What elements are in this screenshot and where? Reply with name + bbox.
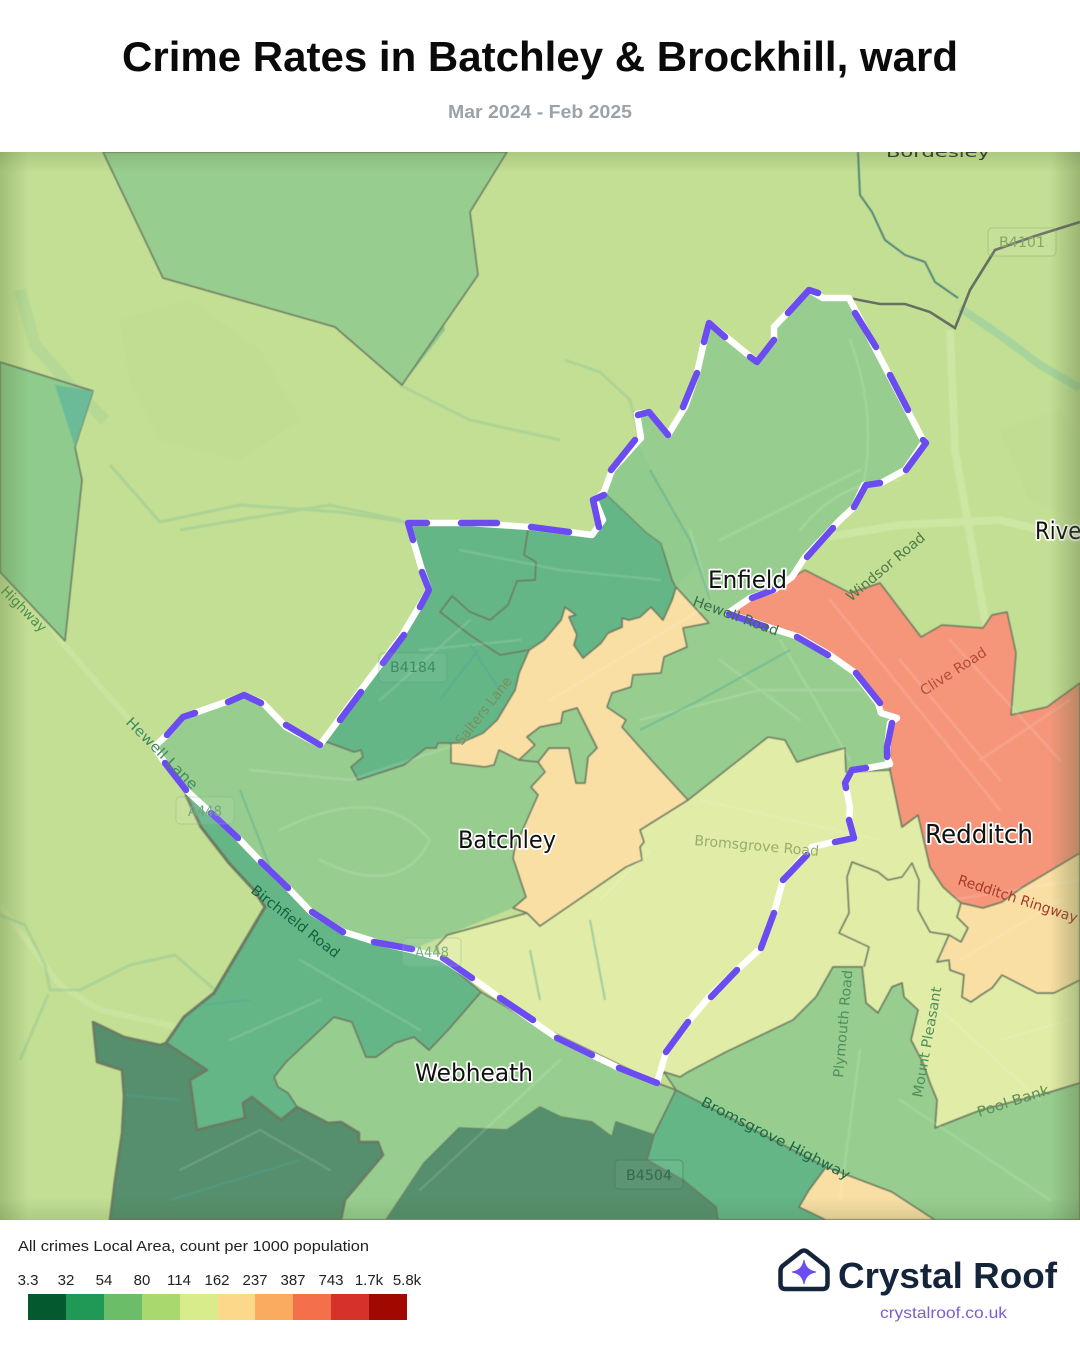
road labels: Plymouth Road [831,969,856,1078]
legend heading: All crimes Local Area, count per 1000 population [18,1238,369,1255]
ward boundary: white underlay [154,290,924,1083]
road shields: B4184 [390,660,436,676]
region: medium green internal shade [607,494,677,587]
road labels: Salters Lane [453,674,516,748]
road labels: Mount Pleasant [910,985,945,1099]
place labels: Redditch [925,820,1033,850]
legend values: 237 [242,1272,268,1289]
legend values: 54 [96,1272,112,1289]
legend values: 743 [318,1272,344,1289]
road labels: Redditch Ringway [956,873,1080,926]
region: beige Batchley centre [451,587,709,926]
road labels: Hewell Lane [122,715,201,793]
region: green B4504 [647,1090,826,1220]
background roads and streams [0,152,1080,1060]
legend values: 32 [58,1272,74,1289]
icon: house outline [780,1250,828,1289]
road labels [0,145,1080,1183]
legend colour scale [28,1294,407,1320]
region: medium green south west (Webheath) [274,992,676,1220]
street and stream detail [125,340,1080,1200]
map base layers [0,152,1080,1220]
region: darkest green south centre [386,1107,718,1220]
road shields: A448 [188,804,222,820]
place labels [415,517,1080,1087]
place labels: Batchley [458,826,556,854]
road shields: A448 [415,945,449,961]
legend values: 162 [204,1272,230,1289]
road labels: Hewell Road [691,594,781,640]
region: yellow inner ward lines [839,862,949,967]
road shields [176,228,1056,1189]
region: salmon Redditch centre [728,570,1080,908]
region: ward medium green base [154,290,924,950]
logo url: crystalroof.co.uk [880,1305,1008,1322]
region: thick outer edge Birchfield [166,795,265,1043]
road labels: Windsor Road [843,530,929,605]
road labels: Pool Bank [975,1082,1052,1121]
road labels: Bromsgrove Highway [698,1094,852,1183]
title: Crime Rates in Batchley & Brockhill, ward [122,33,958,80]
ward boundary: purple dashes [165,290,926,1083]
region: beige east tile [937,853,1080,1002]
road labels: Clive Road [917,645,990,699]
road labels: Bordesley [886,145,990,161]
logo wordmark: Crystal Roof [838,1255,1058,1296]
road shields: B4101 [999,235,1045,251]
map edge vignette [0,152,1080,1220]
legend values: 3.3 [18,1272,38,1289]
region: north forest tile [103,152,507,385]
place labels: Webheath [415,1059,533,1087]
legend values: 80 [134,1272,150,1289]
subtitle: date range: Mar 2024 - Feb 2025 [448,102,632,122]
region: dark green inner boundaries [440,530,536,655]
region: green ring inside beige [519,708,597,783]
legend [18,1238,422,1320]
logo [780,1250,1058,1322]
legend values: 5.8k [393,1272,422,1289]
legend values [18,1272,422,1289]
region: darker green Birchfield [166,793,481,1130]
place labels: Enfield [708,566,787,594]
region: medium green south east (Plymouth Road) [664,967,1080,1220]
legend values: 114 [167,1272,191,1289]
region: darkest green south west [93,1022,383,1220]
region: west edge tile [0,362,93,641]
region: beige south tile [799,1167,935,1220]
region: dark green north Batchley [320,492,676,780]
road labels: Bromsgrove Road [694,833,820,860]
region: west edge teal patch [55,385,93,447]
legend values: 1.7k [355,1272,384,1289]
road shields: B4504 [626,1168,672,1184]
road labels: Birchfield Road [248,883,342,962]
legend values: 387 [280,1272,306,1289]
region: pale yellow southern ward and east [436,737,1080,1128]
top-right dark boundary line [849,222,1080,328]
choropleth map [0,145,1080,1220]
icon: purple star [792,1260,816,1284]
